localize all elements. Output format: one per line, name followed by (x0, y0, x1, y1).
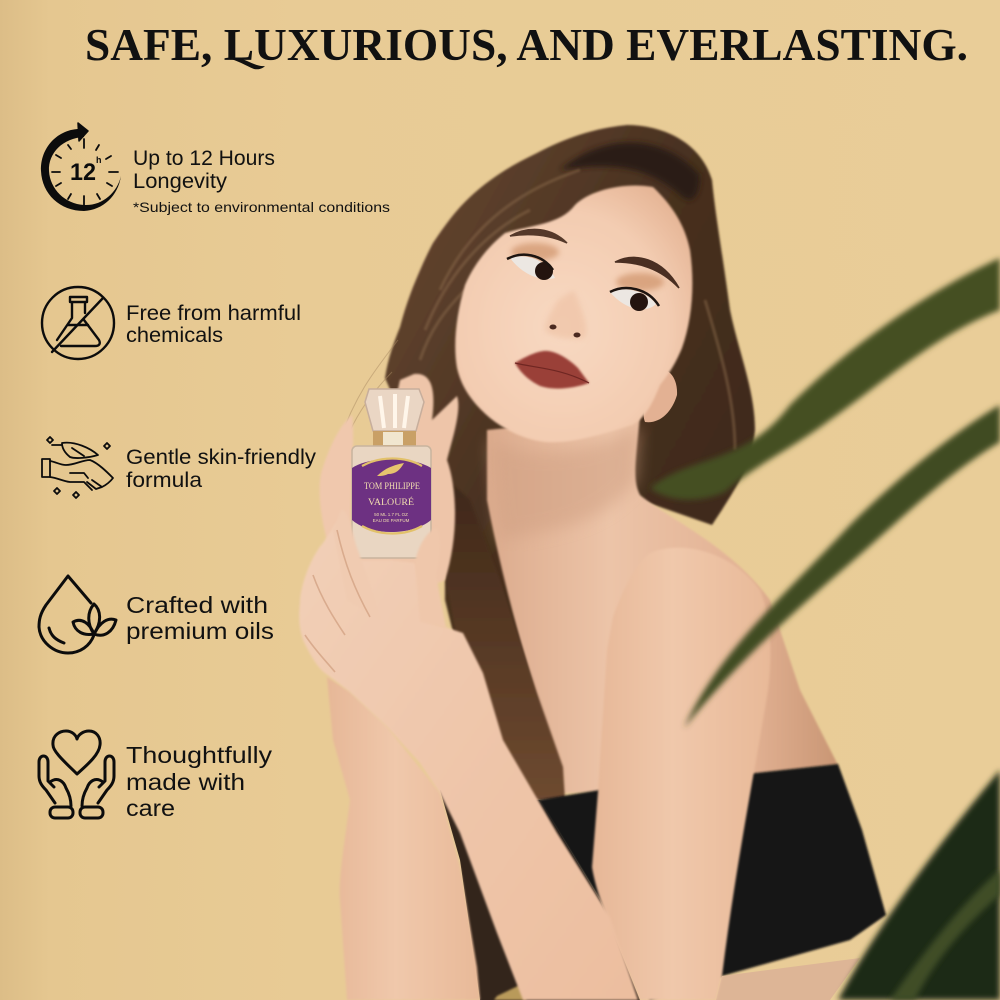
lower hair (440, 790, 640, 1000)
left forearm (327, 677, 480, 1000)
plant leaves (650, 258, 1000, 1000)
bottle cap (365, 389, 424, 431)
text: longevity: Longevity (133, 170, 228, 193)
text: care: care (126, 795, 175, 821)
long hair over chest (447, 480, 565, 800)
title: SAFE, LUXURIOUS, AND EVERLASTING. (85, 19, 968, 70)
text: longevity (133, 147, 390, 215)
right eye (610, 288, 659, 311)
icon: hand and feather (42, 437, 113, 498)
bull emblem (377, 463, 404, 476)
feature: longevity (41, 123, 390, 215)
label text: TOM PHILIPPE (364, 481, 420, 491)
gold arcs (362, 458, 422, 534)
text: chemicals (126, 302, 301, 347)
perfume bottle: VALOURÉ (368, 497, 415, 507)
fingers behind bottle (360, 374, 458, 600)
lips (515, 351, 589, 389)
text: oils: Crafted with (126, 592, 268, 618)
text: formula (126, 446, 317, 492)
text: formula: Gentle skin-friendly (126, 446, 317, 469)
text: longevity: Up to 12 Hours (133, 147, 275, 170)
text: oils (126, 592, 274, 644)
face (455, 186, 692, 442)
icon: clock 12h: 12 (70, 159, 96, 186)
L swash (226, 58, 265, 69)
text: oils: premium oils (126, 618, 274, 644)
right eyebrow (615, 258, 679, 288)
photo: woman (299, 125, 886, 1000)
lip line (515, 363, 589, 383)
eye makeup (511, 243, 664, 291)
text: chemicals: chemicals (126, 324, 223, 347)
leaf highlight (890, 870, 1000, 1000)
icon: clock 12h: h (96, 155, 102, 165)
perfume bottle: EAU DE PARFUM (373, 518, 410, 523)
glass body (352, 446, 431, 558)
feature: gentle skin-friendly formula (42, 437, 317, 498)
gold skirt detail (494, 985, 527, 1000)
upper arm (592, 548, 770, 1000)
feature: premium oils (39, 576, 274, 653)
neck shadow (490, 425, 640, 540)
neck and chest (487, 415, 838, 793)
icon: oil drop with leaves (39, 576, 116, 653)
text: care: made with (126, 769, 245, 795)
flyaway strands (335, 340, 398, 470)
leaf lower (838, 770, 1000, 1000)
front hand and forearm (299, 515, 638, 1000)
black top (538, 764, 886, 1000)
purple label (352, 459, 431, 532)
gold collar (373, 431, 416, 446)
perfume bottle (352, 389, 431, 558)
icon: hands holding heart (39, 731, 114, 818)
nose (545, 290, 586, 339)
index finger (333, 510, 382, 622)
leaf middle (684, 405, 1000, 728)
leaf upper (650, 258, 1000, 500)
feature: free from harmful chemicals (42, 287, 301, 359)
hair crown shadow (560, 142, 700, 200)
icon: clock 12h (41, 123, 121, 211)
waist skin (716, 958, 860, 1000)
hair (385, 125, 755, 793)
text: chemicals: Free from harmful (126, 302, 301, 325)
ear (644, 370, 677, 422)
thumb (415, 528, 446, 628)
perfume bottle: 50 ML 1.7 FL OZ (374, 512, 408, 517)
raised finger (320, 415, 353, 555)
text: formula: formula (126, 469, 202, 492)
left eye (507, 255, 555, 280)
icon: crossed flask (42, 287, 114, 359)
feature: made with care (39, 731, 273, 821)
text: longevity: *Subject to environmental conditions (133, 199, 390, 215)
text: care (126, 742, 273, 821)
finger creases (305, 530, 370, 672)
text: care: Thoughtfully (126, 742, 273, 768)
hair highlights (420, 170, 735, 450)
left eyebrow (510, 229, 567, 243)
